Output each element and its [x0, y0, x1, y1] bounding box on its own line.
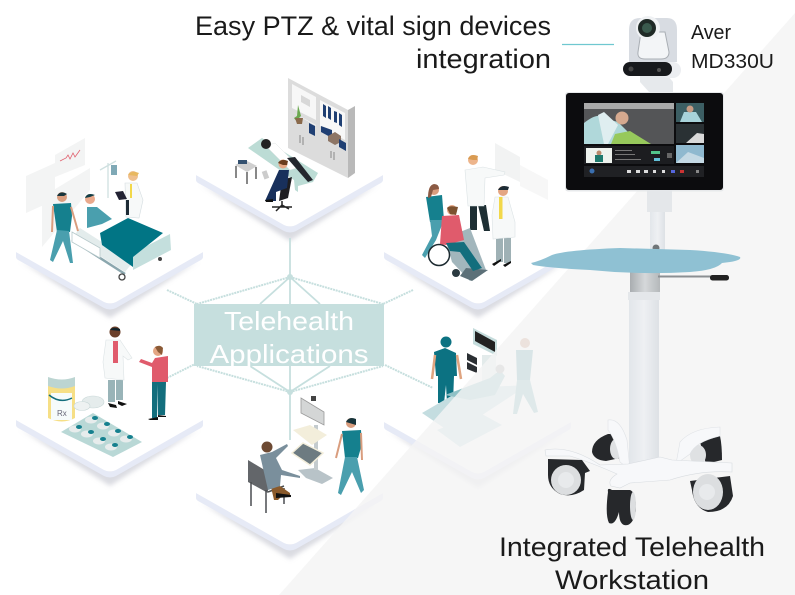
front doctor: [496, 238, 511, 263]
mini cart: [298, 468, 333, 484]
column: [628, 292, 660, 300]
nurse: [53, 203, 72, 232]
caption: Integrated Telehealth Workstation: Workstation: [555, 565, 709, 595]
base arms: [608, 420, 630, 470]
faint data panel: [495, 143, 520, 182]
scene: pharmacy: Rx: [57, 409, 67, 418]
bed: [72, 228, 133, 272]
front-left caster: [548, 459, 590, 495]
chair: [248, 460, 268, 493]
hub network connector lines: [167, 238, 433, 440]
seated man: [271, 486, 290, 500]
doctor: [108, 380, 123, 402]
camera label: Aver MD330U: [691, 22, 774, 73]
counsellor: [265, 170, 289, 201]
platform: pharmacy: [16, 365, 203, 486]
doctor: [125, 183, 143, 218]
scene: pharmacy: [48, 326, 168, 457]
patient: [152, 382, 166, 418]
front-right caster: [690, 476, 733, 512]
assistant nurse: [516, 350, 533, 380]
platform: consultation: [196, 120, 383, 241]
chair: [279, 177, 292, 201]
scene: patient bedside: [26, 138, 171, 280]
hub label: Telehealth Applications: Applications: [210, 339, 368, 369]
caption: Easy PTZ & vital sign devices integration: [195, 11, 551, 74]
surgeon: [438, 376, 454, 403]
table: [235, 160, 257, 172]
blister pack: [61, 413, 142, 457]
side videos: [676, 103, 704, 122]
scene: remote diagnosis: [248, 396, 364, 513]
grey diagonal background: [279, 13, 795, 595]
platform: rehabilitation: [384, 197, 571, 318]
platform: patient bedside: [16, 197, 203, 318]
table: [437, 413, 502, 447]
back doctor: [470, 205, 490, 231]
cart: column and wheeled base: [545, 292, 733, 525]
iv stand: [100, 161, 116, 198]
caption: Easy PTZ & vital sign devices integration: Easy PTZ & vital sign devices: [195, 11, 551, 41]
couch: [248, 138, 318, 192]
rear wheels: [592, 434, 620, 461]
main video: [584, 103, 674, 144]
front caster: [607, 489, 636, 525]
lying patient: [266, 143, 300, 170]
pill bottle: [48, 385, 75, 422]
loose pills: [82, 396, 104, 408]
hub label: Telehealth Applications: [194, 274, 384, 395]
platform: remote diagnosis: [196, 438, 383, 559]
control bar: [584, 166, 704, 177]
scene: rehabilitation wheelchair: [422, 143, 548, 281]
scene: consultation: [235, 78, 355, 211]
monitor stack: [473, 328, 497, 356]
wheelchair: [445, 228, 486, 281]
camera label: Aver MD330U: Aver: [691, 22, 731, 44]
caption: Integrated Telehealth Workstation: Integrated Telehealth: [499, 532, 765, 562]
monitor: telehealth video call: [565, 92, 724, 192]
caption: Easy PTZ & vital sign devices integration: integration: [416, 44, 551, 74]
hub label: Telehealth Applications: Telehealth: [224, 306, 354, 336]
connector line: [562, 44, 614, 46]
info panel: [584, 146, 674, 164]
patient: [87, 207, 112, 228]
scene: surgery: [422, 328, 538, 447]
nurse pushing: [426, 195, 444, 222]
faint data panels: [26, 138, 90, 247]
caption: Integrated Telehealth Workstation: [499, 532, 765, 595]
camera: PTZ: [623, 16, 681, 93]
platform: surgery: [384, 367, 571, 488]
cart: pole and tray: [531, 190, 740, 293]
patient: [440, 215, 464, 245]
bookshelf: [288, 78, 348, 178]
nurse: [342, 430, 362, 458]
camera label: Aver MD330U: MD330U: [691, 51, 774, 73]
